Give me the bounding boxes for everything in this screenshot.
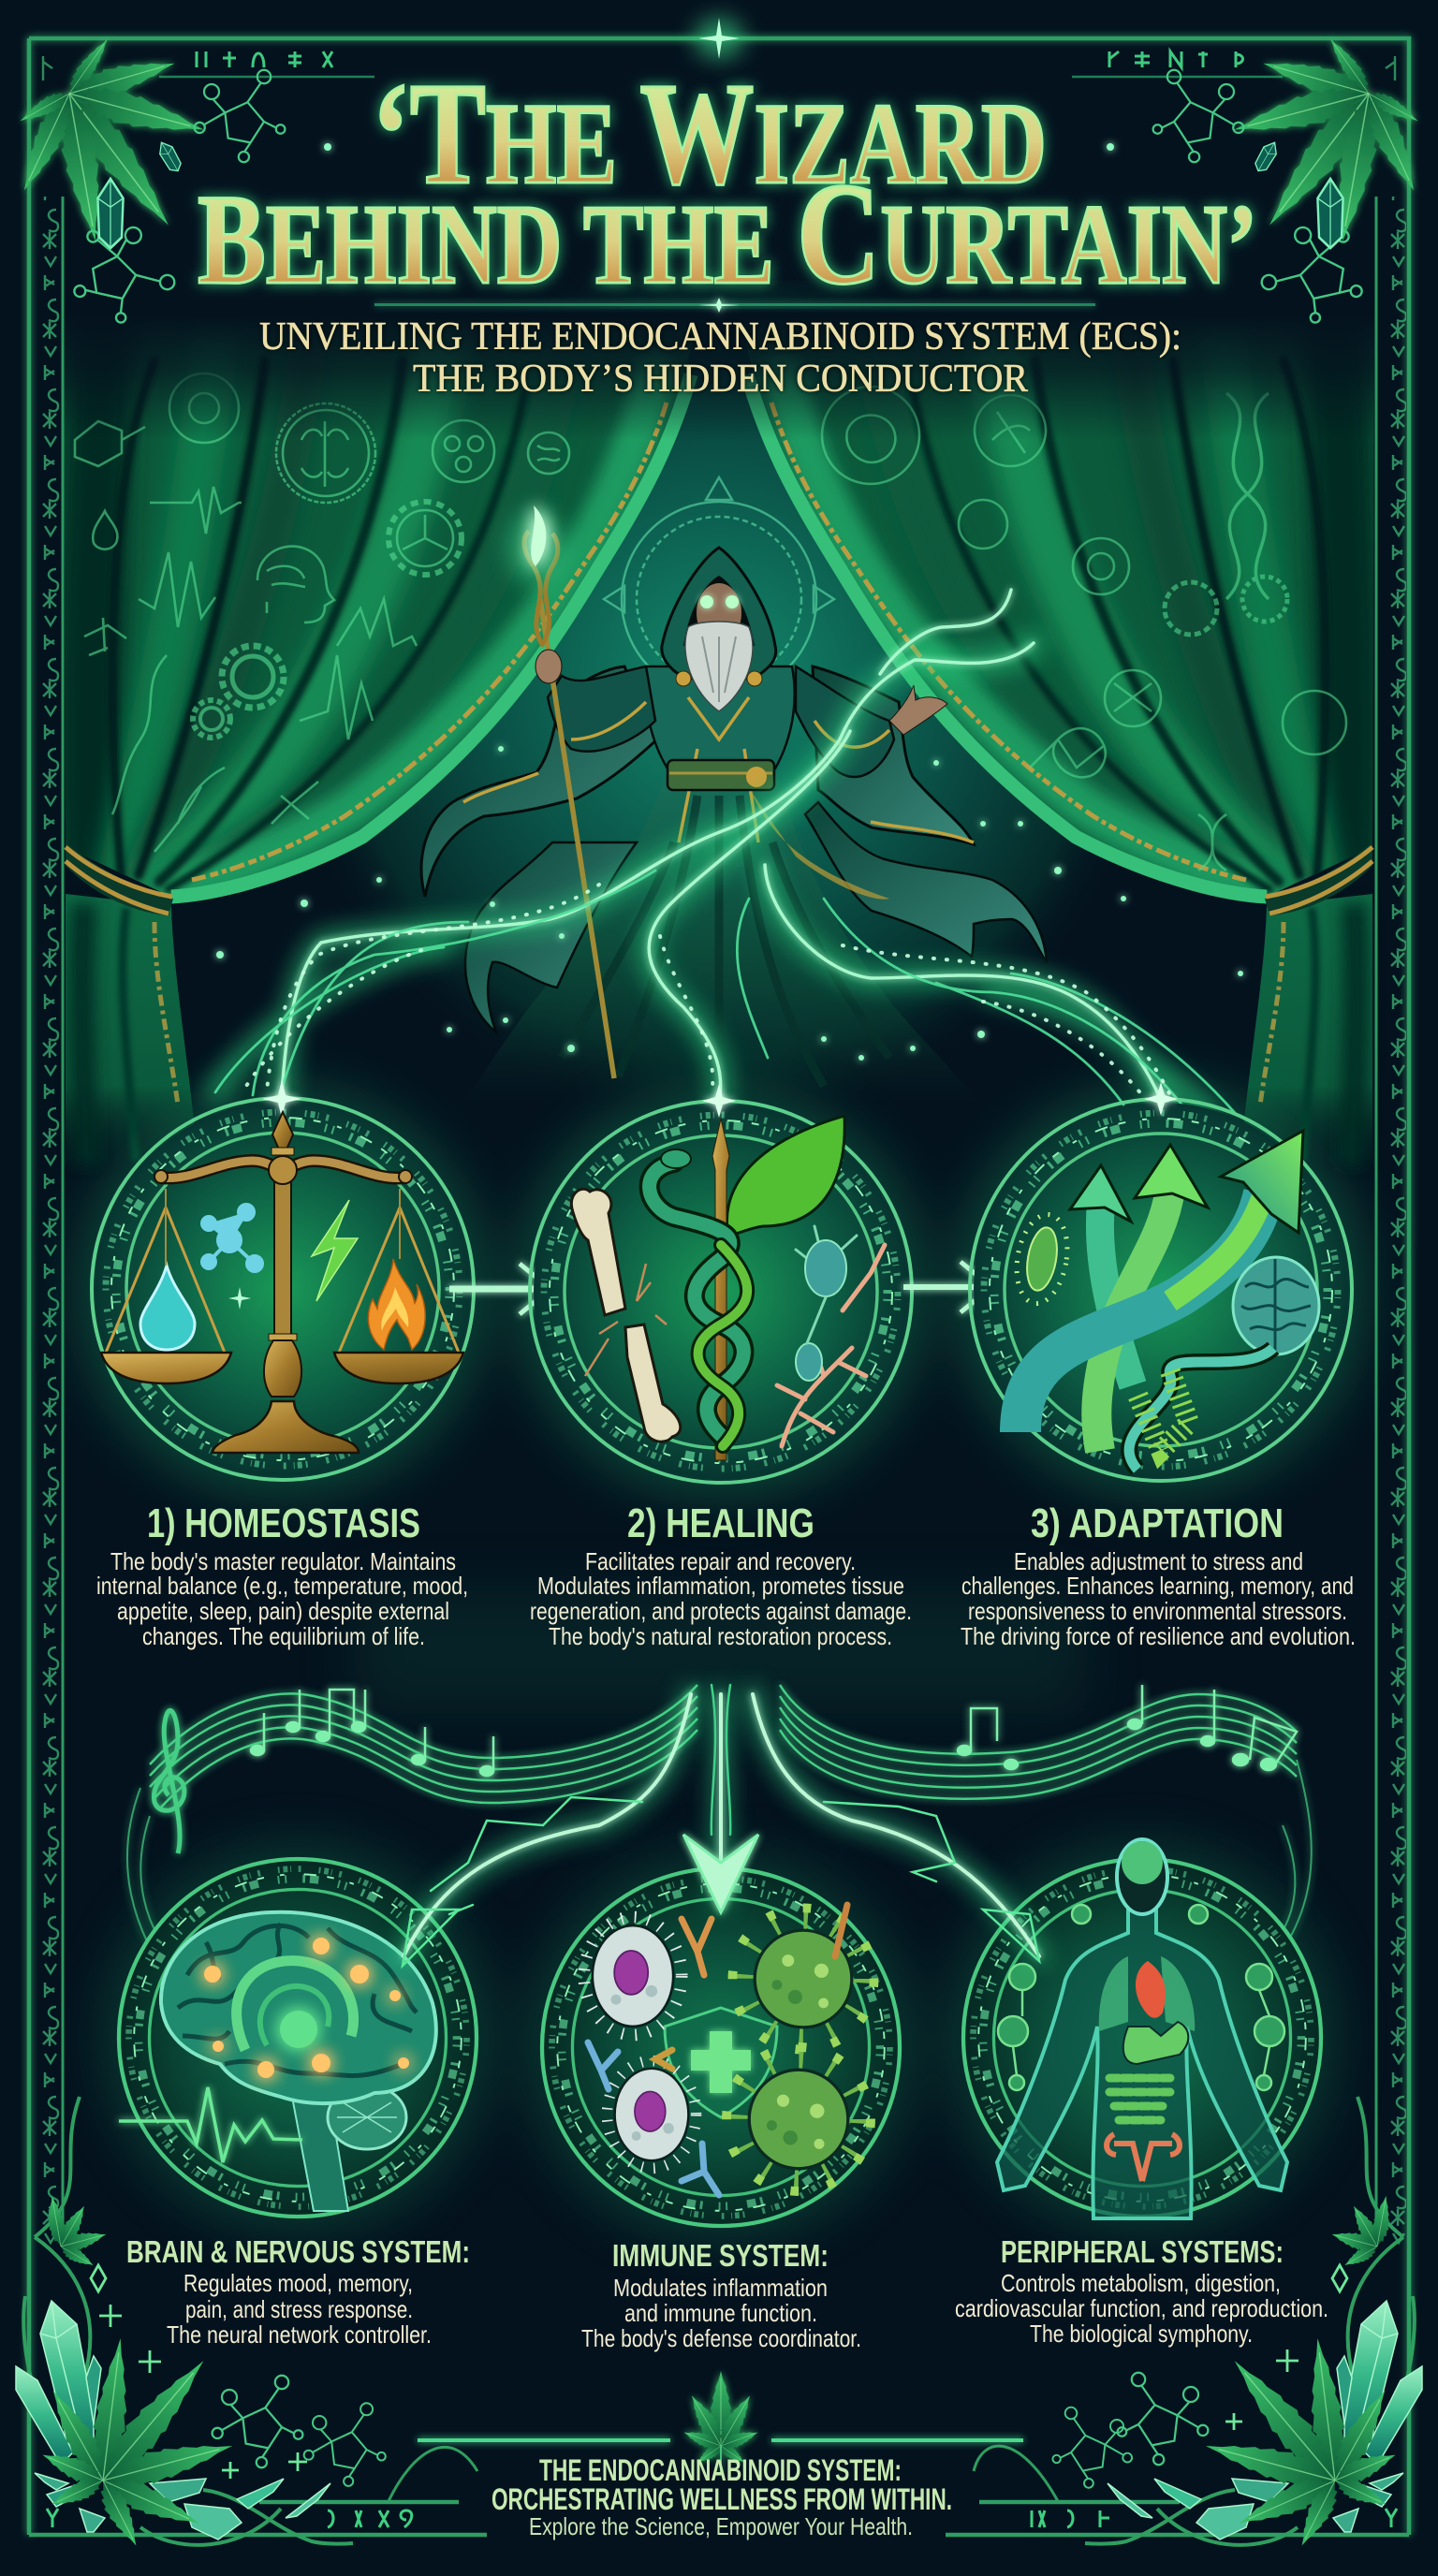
text: adaptation: challenges. Enhances learning, memory, and	[961, 1572, 1354, 1600]
icon: human body	[997, 1910, 1287, 2218]
icon: brain stem and cerebellum	[292, 2086, 406, 2211]
text: brain and nervous system	[126, 2234, 470, 2349]
arrow: homeostasis to healing	[449, 1264, 550, 1314]
text: immune system: Modulates inflammation	[613, 2274, 828, 2302]
star on ring top	[702, 1084, 736, 1118]
vines	[35, 2097, 1403, 2501]
star on ring top	[1144, 1082, 1178, 1116]
gold trims	[463, 697, 974, 842]
curtain science symbols left	[75, 373, 569, 852]
treble clef	[154, 1710, 184, 1853]
title: ‘THE WIZARD	[372, 52, 1047, 214]
music notes	[251, 1690, 493, 1776]
icon: nerve cells	[777, 1226, 885, 1446]
icon: water drop	[140, 1266, 195, 1350]
text: homeostasis	[96, 1500, 468, 1650]
subtitle: UNVEILING THE ENDOCANNABINOID SYSTEM (ECS):	[259, 315, 1181, 359]
text: peripheral systems: The biological symphony.	[1030, 2320, 1253, 2348]
subtitle	[259, 315, 1181, 401]
text: adaptation: responsiveness to environmental stressors.	[968, 1597, 1347, 1625]
text: healing	[530, 1500, 912, 1650]
curtain fade behind subtitle	[64, 309, 1374, 445]
icon: heart	[1136, 1961, 1166, 2018]
corner leaf top left	[11, 34, 209, 244]
text: peripheral systems	[955, 2234, 1328, 2348]
icon: dna ribbon	[1129, 1348, 1273, 1470]
icon: virus two	[726, 2047, 871, 2191]
footer leaf emblem	[682, 2371, 760, 2474]
molecules and sparkles bottom	[47, 2265, 1397, 2527]
text: immune system: and immune function.	[624, 2299, 817, 2327]
hood	[662, 548, 776, 679]
title	[198, 52, 1257, 315]
text: peripheral systems: PERIPHERAL SYSTEMS:	[1001, 2234, 1284, 2269]
small leaves on vines	[44, 2194, 1394, 2271]
curtain science symbols right	[822, 387, 1346, 871]
molecules and crystals top	[57, 51, 1379, 334]
footer text: ORCHESTRATING WELLNESS FROM WITHIN.	[492, 2482, 952, 2516]
text: adaptation: 3) ADAPTATION	[1031, 1500, 1284, 1546]
right tail	[805, 802, 1047, 963]
icon: head and brain	[1117, 1839, 1167, 1914]
staff	[507, 505, 614, 1078]
right curtain	[741, 318, 1374, 1165]
text: brain and nervous system: Regulates mood, memory,	[183, 2269, 413, 2297]
circle: brain	[119, 1859, 477, 2217]
star on ring top	[262, 1079, 301, 1119]
text: peripheral systems: Controls metabolism, digestion,	[1001, 2269, 1281, 2297]
right cape	[813, 666, 974, 844]
icon: lungs	[1099, 1956, 1195, 2031]
text: immune system: IMMUNE SYSTEM:	[612, 2238, 829, 2273]
sash	[668, 760, 889, 900]
text: healing: 2) HEALING	[627, 1500, 814, 1546]
halo	[604, 477, 834, 696]
icon: shield	[665, 2008, 777, 2117]
music staff right	[780, 1685, 1312, 1975]
footer divider	[418, 2438, 1023, 2442]
text: healing: Modulates inflammation, prometes tissue	[537, 1572, 904, 1600]
icon: brain	[1233, 1257, 1319, 1354]
footer text: Explore the Science, Empower Your Health.	[529, 2512, 913, 2540]
text: peripheral systems: cardiovascular function, and reproduction.	[955, 2294, 1328, 2322]
clasps	[676, 671, 762, 686]
panel: stage curtains	[64, 309, 1374, 1165]
icon: antibodies	[588, 1905, 847, 2195]
title divider	[374, 298, 1095, 313]
icon: intestines	[1109, 2078, 1170, 2120]
face and beard	[685, 583, 753, 711]
text: homeostasis: appetite, sleep, pain) despite external	[117, 1597, 449, 1625]
icon: rising arrows	[1020, 1131, 1303, 1451]
text: immune system	[581, 2238, 861, 2352]
text: adaptation	[961, 1500, 1356, 1650]
circle glows bottom row	[106, 1846, 1334, 2239]
text: healing: Facilitates repair and recovery.	[585, 1547, 856, 1575]
corner art bottom left	[16, 2237, 353, 2551]
balance scale	[101, 1112, 463, 1453]
circle glows top row	[81, 1089, 1362, 1493]
text: homeostasis: The body's master regulator. Maintains	[110, 1547, 456, 1575]
text: healing: regeneration, and protects against damage.	[530, 1597, 912, 1625]
sleeves	[548, 666, 894, 777]
icon: ecg line	[119, 2087, 302, 2162]
corner leaf top right	[1229, 34, 1427, 244]
circle: healing caduceus	[530, 1084, 912, 1483]
outer arc	[127, 1788, 187, 1994]
icon: virus one	[732, 1908, 874, 2050]
icon: broken bone	[571, 1189, 681, 1442]
title: BEHIND THE CURTAIN’	[198, 153, 1257, 315]
text: brain and nervous system: The neural network controller.	[167, 2320, 432, 2349]
circle: adaptation arrows	[970, 1082, 1352, 1481]
floating sparkles	[216, 746, 1243, 1061]
hands	[536, 650, 947, 735]
text: brain and nervous system: pain, and stress response.	[185, 2295, 413, 2323]
text: homeostasis: changes. The equilibrium of life.	[142, 1622, 425, 1650]
text: homeostasis: 1) HOMEOSTASIS	[147, 1500, 420, 1546]
icon: molecule	[202, 1205, 262, 1271]
icon: reproductive organs	[1107, 2134, 1180, 2181]
text: adaptation: The driving force of resilience and evolution.	[961, 1622, 1356, 1650]
stream core	[282, 590, 1161, 1103]
icon: staff	[712, 1119, 729, 1460]
icon: brain	[161, 1912, 436, 2103]
left cape	[421, 666, 657, 897]
magic streams	[215, 590, 1236, 1114]
stream secondary strands	[215, 871, 1236, 1114]
lightning arrow center	[683, 1685, 758, 1912]
robe lower	[463, 768, 979, 1105]
arrow: healing to adaptation	[903, 1262, 991, 1312]
left curtain	[64, 318, 697, 1165]
outer arc	[1255, 1760, 1312, 1975]
corner art bottom right	[1085, 2237, 1422, 2551]
icon: central green rings	[237, 1961, 354, 2050]
icon: orange neural nodes	[204, 1938, 409, 2078]
stream sparkles	[243, 885, 1170, 1095]
circle: immune	[542, 1868, 900, 2226]
node lines	[998, 1905, 1284, 2090]
lightning arrow right	[753, 1694, 1039, 1961]
icon: leaf	[726, 1116, 844, 1236]
music staff left	[127, 1685, 697, 1994]
footer text: THE ENDOCANNABINOID SYSTEM:	[539, 2453, 902, 2487]
torso	[645, 666, 795, 768]
stream glow	[215, 643, 1208, 1114]
left tail	[465, 842, 637, 1032]
icon: stomach	[1123, 2022, 1188, 2064]
text: brain and nervous system: BRAIN & NERVOUS SYSTEM:	[126, 2234, 470, 2269]
icon: flame	[368, 1259, 425, 1350]
icon: sparkle	[228, 1287, 251, 1310]
lightning arrow left	[403, 1694, 691, 1966]
subtitle: THE BODY’S HIDDEN CONDUCTOR	[413, 358, 1028, 401]
icon: bacterium	[1010, 1210, 1074, 1308]
icon: snakes	[650, 1149, 747, 1446]
text: homeostasis: internal balance (e.g., temperature, mood,	[96, 1572, 468, 1600]
icon: white cell two	[607, 2061, 697, 2168]
text: adaptation: Enables adjustment to stress and	[1014, 1547, 1303, 1575]
text: immune system: The body's defense coordinator.	[581, 2324, 861, 2352]
robe fold lines	[562, 796, 889, 1095]
circle: peripheral systems	[963, 1839, 1321, 2218]
music notes	[958, 1685, 1297, 1770]
text: healing: The body's natural restoration process.	[549, 1622, 892, 1650]
footer text	[492, 2453, 952, 2540]
circle: homeostasis scales	[92, 1079, 474, 1480]
icon: white cell one	[584, 1917, 682, 2035]
icon: lightning	[312, 1200, 358, 1301]
wizard	[421, 477, 1047, 1105]
